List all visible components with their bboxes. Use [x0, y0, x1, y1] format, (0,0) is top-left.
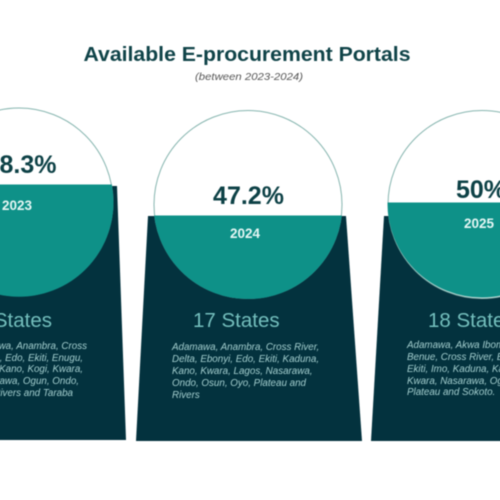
panel: 2023 — [0, 108, 126, 440]
state list 2024: Rivers — [172, 390, 200, 401]
trapezoid base 2025 — [371, 216, 500, 441]
year 2023: 2023 — [2, 198, 32, 213]
state count 2024: 17 States — [193, 309, 280, 332]
state list 2023 — [0, 341, 87, 399]
year 2024: 2024 — [230, 226, 261, 241]
percentage 2024: 47.2% — [213, 182, 284, 210]
circle outline 2023 — [0, 108, 113, 296]
teal fill segment 2023 — [0, 185, 113, 296]
state list 2025: Plateau and Sokoto. — [407, 387, 495, 398]
state list 2025 — [406, 340, 500, 398]
state list 2024: Ondo, Osun, Oyo, Plateau and — [172, 378, 307, 389]
panel: 2024 — [136, 110, 362, 441]
title: Available E-procurement Portals — [84, 44, 410, 66]
year 2025: 2025 — [464, 216, 495, 231]
circle outline 2025 — [388, 110, 500, 298]
state list 2024 — [171, 342, 319, 401]
state list 2024: Kano, Kwara, Lagos, Nasarawa, — [172, 366, 313, 377]
subtitle: (between 2023-2024) — [195, 72, 303, 83]
trapezoid base 2023 — [0, 186, 126, 440]
trapezoid base 2024 — [136, 216, 362, 441]
panel: 2025 — [371, 110, 500, 441]
circle outline 2024 — [154, 110, 342, 298]
teal fill segment 2024 — [155, 216, 341, 299]
teal fill segment 2025 — [388, 203, 500, 297]
state list 2024: Delta, Ebonyi, Edo, Ekiti, Kaduna, — [172, 354, 319, 365]
state list 2024: Adamawa, Anambra, Cross River, — [171, 342, 319, 353]
